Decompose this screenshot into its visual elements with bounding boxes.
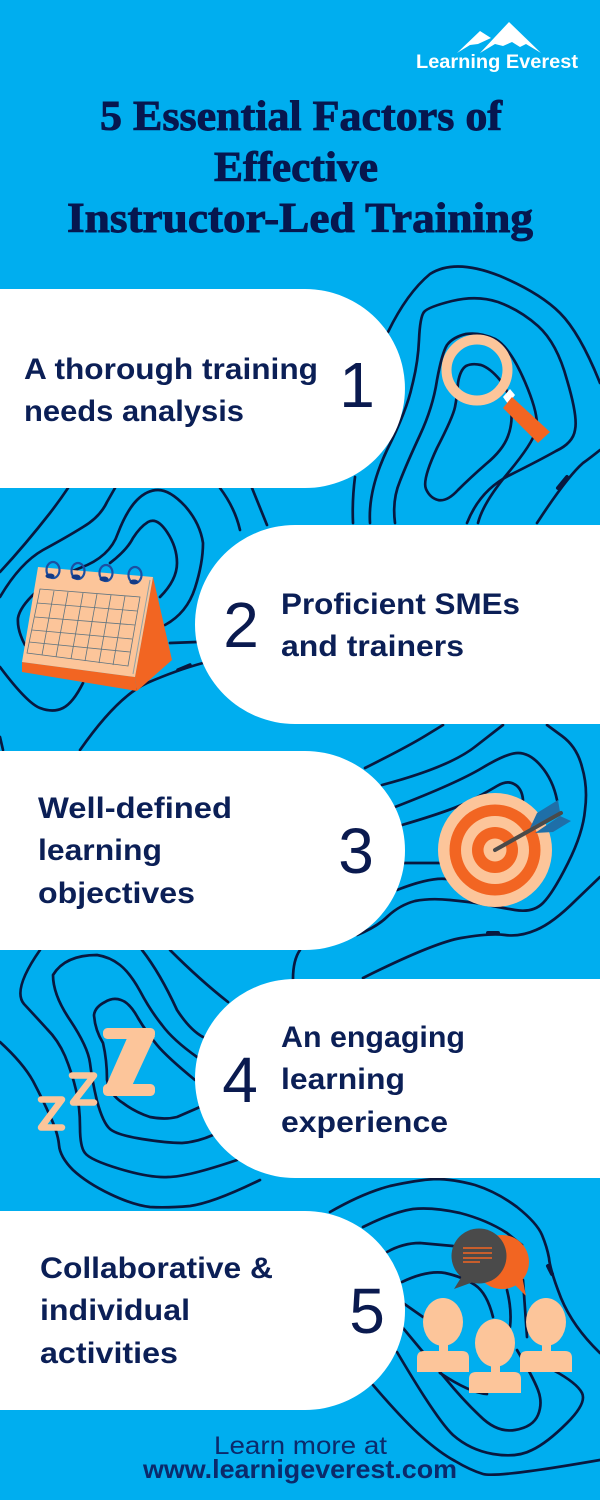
factor 3 number: 3 — [338, 815, 374, 887]
factor 4 text: experience — [281, 1106, 448, 1139]
icon: target with arrow — [438, 793, 571, 907]
factor 4 text: learning — [281, 1063, 405, 1096]
logo: Learning Everest — [416, 22, 579, 73]
title: Instructor-Led Training — [67, 196, 533, 242]
title: Effective — [214, 145, 378, 191]
factor 2 text: and trainers — [281, 630, 464, 663]
footer call to action: www.learnigeverest.com — [142, 1454, 457, 1484]
factor 1 text: needs analysis — [24, 395, 244, 428]
footer call to action — [142, 1432, 457, 1484]
factor 4 number: 4 — [222, 1044, 258, 1116]
icon: group with speech bubbles — [417, 1228, 572, 1393]
factor 5 text: activities — [40, 1337, 178, 1370]
contour lines: section 2 — [0, 488, 267, 750]
factor 3 text: objectives — [38, 877, 195, 910]
contour lines: section 1 — [353, 266, 600, 523]
factor 3 text: Well-defined — [38, 792, 232, 825]
factor 4 text: An engaging — [281, 1021, 465, 1054]
title — [67, 94, 533, 242]
panel: factor 3 — [0, 751, 405, 950]
factor 1 text: A thorough training — [24, 353, 318, 386]
contour lines: section 5 — [330, 1179, 600, 1475]
panel: factor 4 — [195, 979, 600, 1178]
icon: calendar — [22, 562, 172, 691]
contour lines: section 3 — [293, 725, 600, 979]
icon: magnifying glass — [446, 340, 550, 443]
factor 5 text: Collaborative & — [40, 1252, 273, 1285]
factor 1 number: 1 — [339, 349, 375, 421]
factor 2 text: Proficient SMEs — [281, 588, 520, 621]
footer call to action: Learn more at — [214, 1432, 387, 1460]
title: 5 Essential Factors of — [100, 94, 503, 140]
icon: sleeping zzz — [41, 1028, 155, 1128]
factor 5 text: individual — [40, 1294, 190, 1327]
factor 5 number: 5 — [349, 1275, 385, 1347]
logo: Learning Everest: Learning Everest — [416, 52, 579, 73]
factor 3 text: learning — [38, 834, 162, 867]
panel: factor 5 — [0, 1211, 405, 1410]
factor 2 number: 2 — [223, 589, 259, 661]
panel: factor 1 — [0, 289, 405, 488]
panel: factor 2 — [195, 525, 600, 724]
contour lines: section 4 — [0, 950, 260, 1207]
